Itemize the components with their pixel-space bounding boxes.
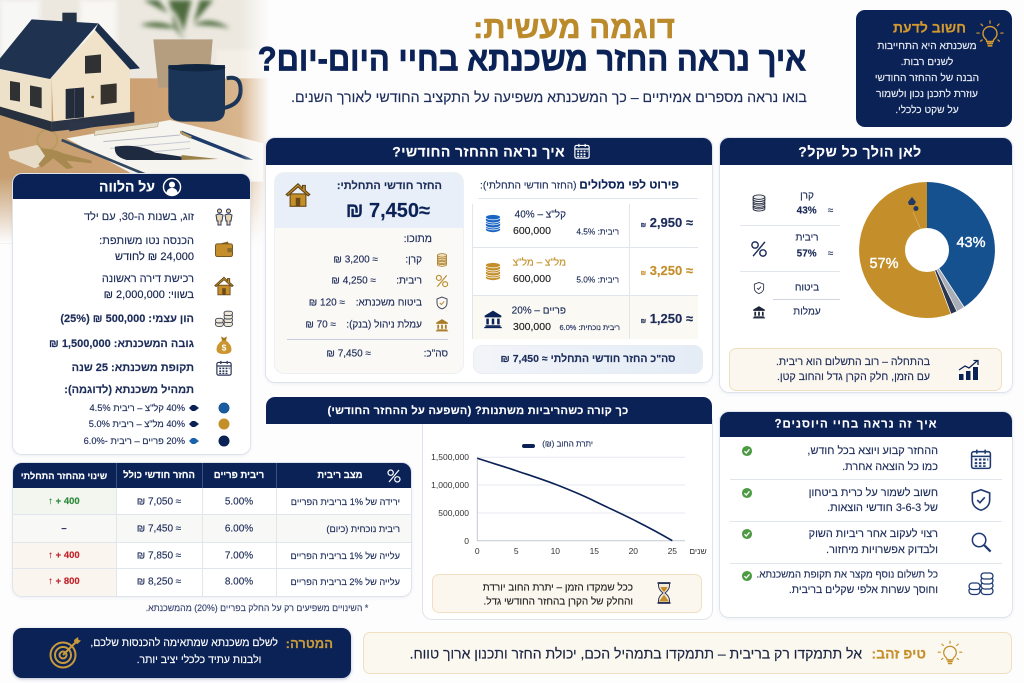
row shading	[13, 488, 116, 514]
icon: bank	[484, 310, 502, 328]
text: fees: עמלות	[793, 306, 821, 318]
callout: over time: עם הזמן, חלק הקרן גדל והחוב קטן.	[777, 371, 930, 383]
panel: the goal	[13, 628, 351, 678]
icon: coins	[215, 310, 233, 327]
card: starting monthly repayment	[275, 173, 463, 373]
text: fixed amount: 600,000	[513, 225, 551, 237]
text: row two: חשוב לשמור על כרית ביטחון	[809, 487, 938, 499]
text: good to know body: משכנתא היא התחייבות	[877, 41, 977, 52]
text: row three second line: ולבדוק אפשרויות מיחזור.	[826, 544, 938, 556]
text: row four: כל תשלום נוסף מקצר את תקופת המשכנתא.	[756, 570, 938, 581]
line chart: remaining balance: 15	[590, 546, 599, 556]
line chart: remaining balance: 500,000	[438, 508, 469, 518]
text: principal value: ≈ 3,200 ₪	[333, 254, 378, 266]
legend dot gold	[218, 418, 230, 430]
check	[742, 488, 752, 498]
callout: debt over time: והחלק של הקרן בהחזר החודשי גדל.	[483, 596, 633, 608]
row: decrease of 1%: ירידה של 1% בריבית הפריים	[291, 497, 400, 507]
icon: calendar	[216, 360, 232, 376]
line chart: remaining balance: שנים	[689, 546, 707, 556]
text: index amount: 600,000	[513, 273, 551, 285]
heading: good to know: חשוב לדעת	[893, 19, 966, 35]
text: equity: הון עצמי: 500,000 ₪ (25%)	[60, 313, 194, 325]
text: fixed track: קל"צ – 40%	[515, 210, 566, 220]
total bar	[474, 346, 702, 373]
icon: magnifier	[970, 530, 992, 554]
text: index track: מל"צ – מל"צ	[513, 258, 566, 268]
icon: shield	[968, 487, 994, 513]
header: about the borrower: על הלווה	[99, 178, 155, 194]
row: increase of 2%: עלייה של 2% בריבית הפריים	[290, 577, 400, 587]
panel: about the borrower	[13, 174, 250, 454]
text: prime rate: ריבית נוכחית: 6.0%	[560, 323, 620, 332]
legend dot blue	[218, 402, 230, 414]
column title: change: שינוי מהחזר התחלתי	[21, 471, 107, 481]
value: 7.00%	[225, 550, 253, 562]
table header row	[13, 463, 411, 488]
row: increase of 1%: עלייה של 1% בריבית הפריים	[290, 551, 400, 561]
icon: wallet	[215, 242, 233, 257]
icon: percent	[386, 468, 402, 484]
panel: what happens when rates change	[266, 397, 713, 620]
text: purchase value: בשווי: 2,000,000 ₪	[104, 289, 194, 301]
header: daily life: איך זה נראה בחיי היוסנים?	[774, 419, 938, 431]
legend line	[522, 444, 535, 448]
icon: money bag	[216, 336, 232, 354]
legend dot navy	[218, 436, 230, 446]
text: good to know body: עוזרת לתכנן נכון ולשמור	[876, 89, 978, 100]
main heading: איך נראה החזר משכנתא בחיי היום-יום?	[258, 40, 806, 78]
icon: couple	[216, 208, 232, 226]
text: row three: רצוי לעקוב אחר ריביות השוק	[809, 528, 938, 540]
change: ↑ + 800	[48, 576, 80, 587]
footnote: * השינויים משפיעים רק על החלק בפריים (20%) מהמשכנתא.	[146, 603, 368, 613]
text: interest: ריבית	[795, 232, 819, 244]
chart body card	[423, 420, 712, 619]
line chart: remaining balance	[431, 452, 707, 556]
title block	[258, 10, 806, 78]
check	[742, 446, 752, 456]
legend arrow	[189, 405, 199, 411]
text: fixed monthly: ≈ 2,950 ₪	[641, 215, 693, 230]
heading: practical example: דוגמה מעשית:	[473, 10, 675, 45]
text: fixed rate: ריבית: 4.5%	[576, 226, 619, 236]
heading: breakdown by tracks: פירוט לפי מסלולים (החזר חודשי התחלתי):	[480, 177, 679, 191]
subtitle: בואו נראה מספרים אמיתיים – כך המשכנתא משפיעה על התקציב החודשי לאורך השנים.	[291, 90, 807, 106]
column title: total monthly: החזר חודשי כולל	[123, 470, 195, 481]
text: index rate: ריבית: 5.0%	[576, 274, 619, 284]
icon: hourglass	[658, 582, 670, 604]
text: fee value: ≈ 70 ₪	[305, 320, 336, 330]
header: rates change: כך קורה כשהריביות משתנות? (השפעה על ההחזר החודשי)	[327, 405, 629, 417]
change: ↑ + 400	[48, 550, 80, 561]
legend: remaining debt: יתרת החוב (₪)	[542, 440, 593, 449]
text: interest share: ≈ 57%	[797, 248, 833, 260]
text: purchase: רכישת דירה ראשונה	[102, 273, 194, 285]
text: row one second line: כמו כל הוצאה אחרת.	[842, 461, 938, 473]
panel: where every shekel goes	[720, 138, 1012, 392]
value: ≈ 7,850 ₪	[137, 550, 181, 562]
text: goal line one: לשלם משכנתא שמתאימה להכנסות שלכם,	[90, 637, 278, 649]
line chart: remaining balance: 5	[514, 546, 519, 556]
line chart: remaining balance: 10	[551, 546, 560, 556]
text: term: תקופת משכנתא: 25 שנה	[72, 362, 194, 374]
hero photo: model house, mug, plant, documents and keys	[0, 0, 268, 244]
text: prime track: פריים – 20%	[512, 306, 566, 316]
text: of which: מתוכו:	[404, 233, 432, 245]
legend: prime track: 20% פריים – ריבית -6.0%	[84, 436, 185, 446]
value: ≈ 7,050 ₪	[137, 496, 181, 508]
column title: scenario: מצב ריבית	[317, 470, 363, 481]
check	[742, 528, 752, 540]
value: 6.00%	[225, 524, 253, 534]
column title: prime rate: ריבית פריים	[214, 470, 264, 481]
text: row one: ההחזר קבוע ויוצא בכל חודש,	[807, 445, 938, 457]
icon: house	[285, 183, 311, 207]
text: good to know body: על שקט כלכלי.	[895, 105, 959, 116]
callout: over time: בהתחלה – רוב התשלום הוא ריבית.	[776, 356, 930, 368]
icon: percent	[436, 274, 448, 288]
legend arrow	[189, 438, 199, 444]
icon: money bag: $	[222, 342, 227, 352]
text: good to know body: לשנים רבות.	[901, 57, 953, 68]
line chart: remaining balance: 0	[475, 546, 480, 556]
value: ≈ 8,250 ₪	[137, 576, 181, 588]
text: principal label: קרן:	[405, 254, 422, 266]
callout: debt over time	[432, 574, 702, 613]
icon: shield	[436, 296, 448, 310]
text: row two second line: של 3-6-3 חודשי הוצאות.	[827, 502, 938, 514]
pie label 43: 43%	[956, 235, 986, 251]
icon: blue coin stack	[486, 214, 500, 232]
text: income: הכנסה נטו משותפת:	[99, 235, 194, 247]
check	[742, 570, 752, 582]
icon: house	[214, 276, 234, 296]
total bar: סה"כ החזר חודשי התחלתי ≈ 7,450 ₪	[500, 353, 676, 365]
panel: daily life	[720, 412, 1012, 617]
icon: target	[49, 637, 81, 669]
icon: calendar	[970, 450, 992, 470]
icon: coin stack	[752, 194, 766, 212]
heading: the goal: המטרה:	[286, 636, 333, 651]
value: ≈ 7,450 ₪	[137, 524, 181, 534]
text: total value: ≈ 7,450 ₪	[326, 348, 371, 360]
header: monthly repayment: איך נראה ההחזר החודשי?	[392, 143, 565, 159]
legend: fixed track: 40% קל"צ – ריבית 4.5%	[90, 403, 185, 413]
icon: person	[162, 178, 182, 196]
panel: golden tip	[363, 632, 1012, 674]
text: prime monthly: ≈ 1,250 ₪	[641, 311, 693, 326]
table: interest scenarios	[13, 463, 411, 596]
text: row four second line: וחוסך עשרות אלפי שקלים בריבית.	[789, 584, 938, 596]
text: insurance label: ביטוח משכנתא:	[356, 298, 422, 308]
text: total label: סה"כ:	[424, 348, 448, 360]
heading: golden tip: טיפ זהב:	[871, 645, 926, 661]
value: 8.00%	[225, 576, 253, 588]
line chart: remaining balance: 20	[629, 546, 638, 556]
icon: growth chart	[958, 360, 979, 380]
text: card title: החזר חודשי התחלתי:	[337, 180, 442, 192]
header: where every shekel goes: לאן הולך כל שקל?	[798, 143, 922, 159]
row: current rate: ריבית נוכחית (כיום)	[326, 524, 400, 534]
change: –	[61, 523, 67, 534]
line chart: remaining balance: 1,500,000	[431, 452, 469, 462]
text: insurance value: ≈ 120 ₪	[309, 298, 345, 308]
header: monthly repayment	[266, 138, 712, 165]
text: interest label: ריבית:	[396, 276, 422, 286]
text: income value: 24,000 ₪ לחודש	[115, 251, 194, 263]
line chart: remaining balance: 1,000,000	[431, 480, 469, 490]
text: goal line two: ולבנות עתיד כלכלי יציב יותר.	[137, 654, 261, 666]
text: mix heading: תמהיל משכנתא (לדוגמה):	[64, 384, 194, 396]
icon: shield	[754, 282, 764, 294]
line chart: remaining balance: 25	[668, 546, 677, 556]
icon: gold coin stack	[486, 262, 500, 280]
change: ↑ + 400	[48, 496, 80, 507]
text: good to know body	[875, 41, 979, 116]
text: couple: זוג, בשנות ה-30, עם ילד	[84, 211, 194, 223]
value: 5.00%	[225, 496, 253, 508]
callout: over time	[729, 348, 1002, 391]
icon: coin stack	[437, 253, 447, 267]
icon: bank	[752, 306, 766, 318]
icon: light bulb	[976, 20, 1004, 47]
text: good to know body: הבנה של ההחזר החודשי	[875, 73, 979, 84]
icon: light bulb	[936, 638, 964, 668]
text: index monthly: ≈ 3,250 ₪	[641, 263, 693, 278]
header: where every shekel goes	[720, 138, 1012, 165]
text: big amount: ≈7,450 ₪	[346, 200, 430, 222]
header: daily life	[720, 412, 1012, 437]
text: principal: קרן	[800, 190, 814, 202]
panel: good to know	[856, 10, 1012, 127]
text: prime amount: 300,000	[513, 321, 551, 333]
text: principal share: ≈ 43%	[797, 206, 833, 216]
header: rates change	[266, 397, 712, 424]
text: tip: אל תתמקדו רק בריבית – תתמקדו בתמהיל הכם, יכולת החזר ותכנון ארוך טווח.	[410, 645, 862, 661]
legend: index track: 40% מל"צ – ריבית 5.0%	[89, 419, 185, 429]
legend arrow	[189, 421, 199, 427]
header: about the borrower	[13, 174, 250, 199]
icon: percent	[751, 241, 767, 257]
pie label 57: 57%	[869, 256, 899, 272]
icon: coins	[967, 572, 995, 596]
text: interest value: ≈ 4,250 ₪	[331, 276, 376, 286]
pie chart	[859, 182, 995, 318]
text: mortgage amount: גובה המשכנתא: 1,500,000 ₪	[49, 338, 194, 350]
text: fee label: עמלת ניהול (בנק):	[346, 320, 422, 330]
icon: bank	[436, 319, 448, 332]
line chart: remaining balance: 0	[464, 536, 469, 546]
callout: debt over time: ככל שמקדו הזמן – יתרת החוב יורדת	[483, 582, 633, 594]
icon: calendar	[574, 144, 590, 159]
text: insurance: ביטוח	[795, 282, 819, 294]
panel: monthly repayment	[266, 138, 712, 382]
